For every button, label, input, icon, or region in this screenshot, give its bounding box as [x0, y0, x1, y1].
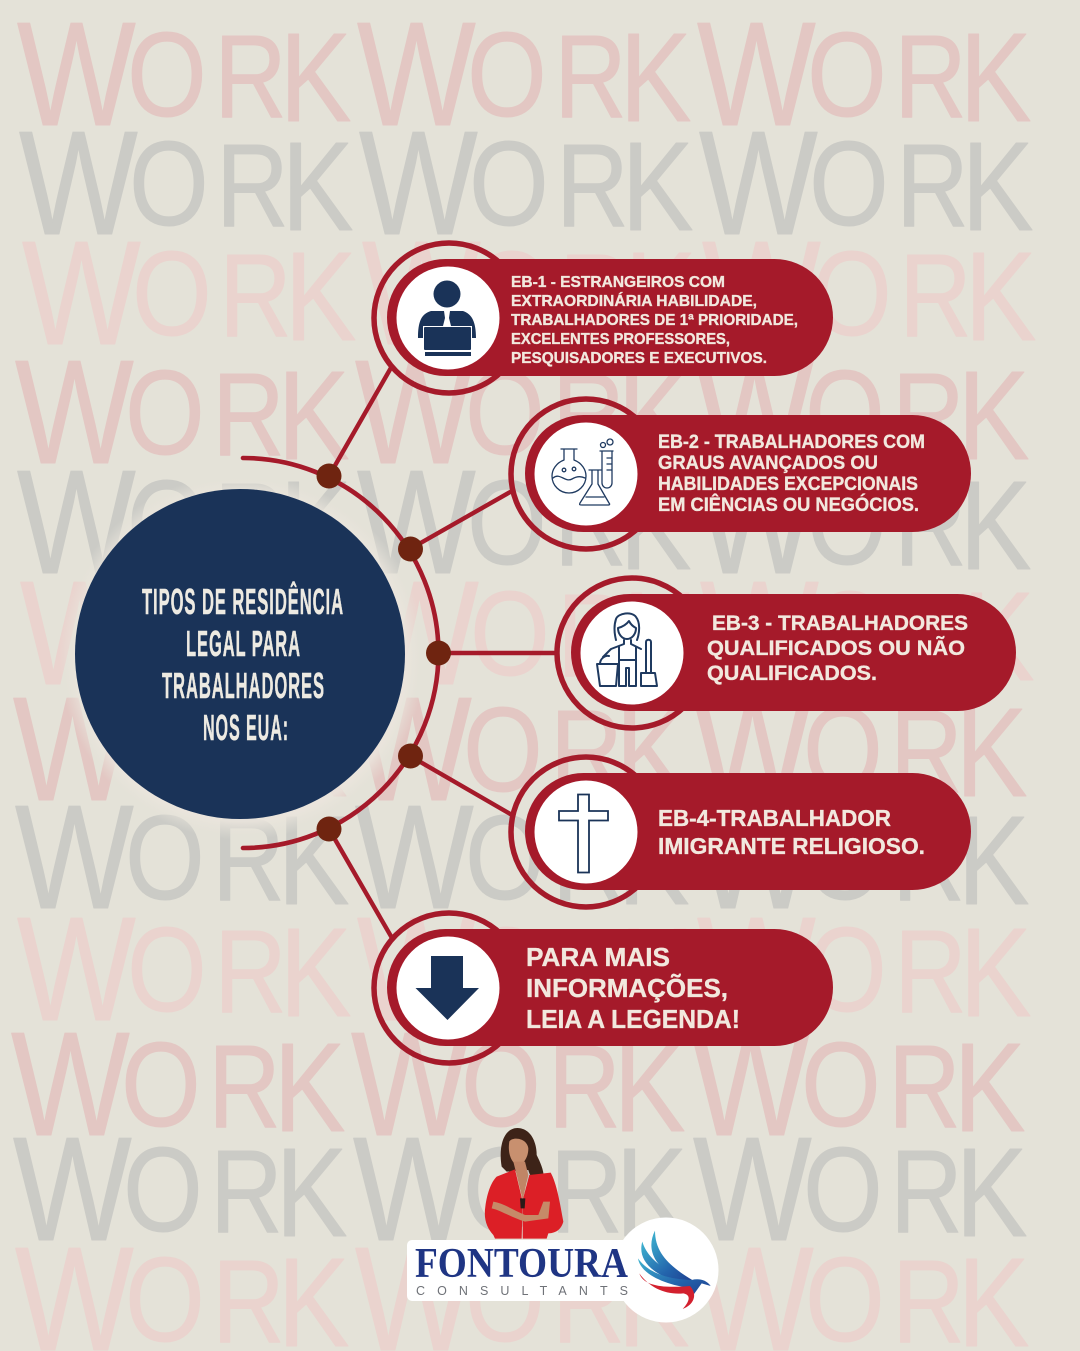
background pattern: repeated WORK words: W	[13, 1107, 132, 1272]
background pattern: repeated WORK words: O	[132, 226, 212, 361]
background pattern: repeated WORK words: R	[554, 906, 627, 1038]
background pattern: repeated WORK words: W	[699, 101, 818, 266]
background pattern: repeated WORK words: W	[357, 440, 476, 605]
text: EB-1	[511, 274, 798, 367]
background pattern: repeated WORK words: O	[129, 116, 209, 251]
background pattern: repeated WORK words: O	[463, 682, 543, 817]
title: LEGAL PARA	[186, 623, 301, 664]
background pattern: repeated WORK words: R	[890, 686, 963, 818]
background pattern: repeated WORK words: O	[470, 566, 550, 701]
background pattern: repeated WORK words: R	[208, 1021, 281, 1153]
connector dots	[316, 464, 451, 842]
logo: Fontoura Consultants: CONSULTANTS	[416, 1284, 628, 1298]
text: EB-1: PESQUISADORES E EXECUTIVOS.	[511, 350, 767, 367]
text: EB-3: QUALIFICADOS.	[707, 662, 877, 685]
portrait: consultant in red blazer	[485, 1128, 563, 1239]
background pattern: repeated WORK words: R	[896, 120, 969, 252]
text: EB-4: IMIGRANTE RELIGIOSO.	[658, 833, 925, 859]
background pattern: repeated WORK words: K	[278, 790, 349, 931]
background pattern: repeated WORK words: K	[282, 116, 353, 257]
background pattern: repeated WORK words: R	[894, 11, 967, 143]
background pattern: repeated WORK words: O	[130, 566, 210, 701]
background pattern: repeated WORK words: K	[616, 1122, 687, 1263]
background pattern: repeated WORK words: O	[805, 345, 885, 480]
background pattern: repeated WORK words: W	[695, 330, 814, 495]
background pattern: repeated WORK words: K	[620, 7, 691, 148]
background pattern: repeated WORK words: W	[20, 551, 139, 716]
background pattern: repeated WORK words: K	[280, 902, 351, 1043]
background pattern: repeated WORK words: W	[693, 1107, 812, 1272]
background pattern: repeated WORK words: O	[803, 1122, 883, 1257]
background pattern: repeated WORK words: R	[550, 1126, 623, 1258]
background pattern: repeated WORK words: R	[890, 1126, 963, 1258]
background pattern: repeated WORK words: R	[892, 349, 965, 481]
text: EB-4	[658, 805, 925, 859]
title: NOS EUA:	[203, 707, 289, 748]
background pattern: repeated WORK words: R	[210, 686, 283, 818]
background pattern: repeated WORK words: K	[625, 226, 696, 367]
background pattern: repeated WORK words: K	[278, 345, 349, 486]
background pattern: repeated WORK words: K	[618, 345, 689, 486]
logo eagle	[638, 1231, 711, 1309]
text: EB-1: EXCELENTES PROFESSORES,	[511, 331, 730, 348]
connector arc and lines	[243, 366, 556, 938]
background pattern: repeated WORK words: R	[559, 230, 632, 362]
background pattern: repeated WORK words: R	[554, 11, 627, 143]
background pattern: repeated WORK words: W	[351, 1002, 470, 1167]
background pattern: repeated WORK words: W	[357, 887, 476, 1052]
background pattern: repeated WORK words: K	[274, 1017, 345, 1158]
background pattern: repeated WORK words: O	[807, 455, 887, 590]
background pattern: repeated WORK words: R	[210, 1126, 283, 1258]
background pattern: repeated WORK words: O	[463, 1122, 543, 1257]
background pattern: repeated WORK words: R	[557, 570, 630, 702]
background pattern: repeated WORK words: K	[618, 790, 689, 931]
background pattern: repeated WORK words: W	[22, 211, 141, 376]
background pattern: repeated WORK words: W	[697, 887, 816, 1052]
background pattern: repeated WORK words: W	[700, 551, 819, 716]
background pattern: repeated WORK words: W	[15, 775, 134, 940]
background pattern: repeated WORK words: R	[216, 120, 289, 252]
icon: cross	[559, 794, 608, 872]
logo: Fontoura Consultants	[407, 1218, 718, 1322]
panel: EB-2	[511, 399, 971, 549]
background pattern: repeated WORK words: K	[283, 566, 354, 707]
icon: cleaning worker	[597, 613, 657, 686]
background pattern: repeated WORK words: O	[472, 226, 552, 361]
icon: person at laptop	[418, 280, 476, 356]
background pattern: repeated WORK words: O	[123, 1122, 203, 1257]
background pattern: repeated WORK words: K	[280, 7, 351, 148]
background pattern: repeated WORK words: O	[467, 902, 547, 1037]
background pattern: repeated WORK words: O	[807, 902, 887, 1037]
background pattern: repeated WORK words: W	[362, 211, 481, 376]
background pattern: repeated WORK words: O	[812, 226, 892, 361]
icon: lab flasks	[552, 439, 613, 505]
background pattern: repeated WORK words: W	[13, 667, 132, 832]
text: call to action: LEIA A LEGENDA!	[526, 1004, 740, 1034]
background pattern: repeated WORK words: R	[899, 230, 972, 362]
background pattern: repeated WORK words: W	[11, 1002, 130, 1167]
background pattern: repeated WORK words: O	[801, 1017, 881, 1152]
background pattern: repeated WORK words: O	[127, 455, 207, 590]
text: EB-3: EB-3 - TRABALHADORES	[712, 612, 968, 635]
background pattern: repeated WORK words: W	[691, 1002, 810, 1167]
background pattern: repeated WORK words: R	[552, 349, 625, 481]
background pattern: repeated WORK words: R	[214, 459, 287, 591]
background pattern: repeated WORK words: R	[214, 906, 287, 1038]
background pattern: repeated WORK words: R	[554, 459, 627, 591]
background pattern: repeated WORK words: O	[465, 345, 545, 480]
background pattern: repeated WORK words: W	[353, 667, 472, 832]
background pattern: repeated WORK words: R	[894, 906, 967, 1038]
background pattern: repeated WORK words: K	[276, 682, 347, 823]
background pattern: repeated WORK words: R	[894, 459, 967, 591]
background pattern: repeated WORK words: R	[548, 1021, 621, 1153]
text: call to action	[526, 942, 740, 1034]
background pattern: repeated WORK words: W	[15, 330, 134, 495]
center circle with title	[59, 474, 425, 840]
background pattern: repeated WORK words: R	[550, 686, 623, 818]
text: EB-2: HABILIDADES EXCEPCIONAIS	[658, 474, 918, 495]
background pattern: repeated WORK words: K	[958, 790, 1029, 931]
panel: call to action	[374, 913, 833, 1063]
background pattern: repeated WORK words: W	[355, 330, 474, 495]
background pattern: repeated WORK words: W	[693, 667, 812, 832]
background pattern: repeated WORK words: K	[958, 345, 1029, 486]
background pattern: repeated WORK words: R	[212, 349, 285, 481]
background pattern: repeated WORK words: O	[125, 345, 205, 480]
background pattern: repeated WORK words: K	[963, 566, 1034, 707]
background pattern: repeated WORK words: O	[465, 790, 545, 925]
text: EB-1: EXTRAORDINÁRIA HABILIDADE,	[511, 291, 757, 310]
background pattern: repeated WORK words: K	[623, 566, 694, 707]
background pattern: repeated WORK words: O	[809, 116, 889, 251]
background pattern: repeated WORK words: K	[614, 1017, 685, 1158]
center circle with title: TIPOS DE RESIDÊNCIA	[142, 580, 344, 622]
background pattern: repeated WORK words: R	[892, 794, 965, 926]
background pattern: repeated WORK words: K	[620, 902, 691, 1043]
background pattern: repeated WORK words: W	[695, 775, 814, 940]
background pattern: repeated WORK words: O	[127, 902, 207, 1037]
background pattern: repeated WORK words: K	[954, 1017, 1025, 1158]
text: EB-4: EB-4-TRABALHADOR	[658, 805, 891, 831]
background pattern: repeated WORK words: R	[556, 120, 629, 252]
panel: EB-3	[557, 578, 1016, 728]
background pattern: repeated WORK words: K	[962, 116, 1033, 257]
background pattern: repeated WORK words: K	[280, 455, 351, 596]
background pattern: repeated WORK words: W	[17, 440, 136, 605]
background pattern: repeated WORK words: W	[359, 101, 478, 266]
background pattern: repeated WORK words: O	[125, 790, 205, 925]
background pattern: repeated WORK words: W	[360, 551, 479, 716]
background pattern: repeated WORK words: W	[697, 440, 816, 605]
background pattern: repeated WORK words: K	[616, 682, 687, 823]
background pattern: repeated WORK words: O	[807, 7, 887, 142]
text: EB-1: TRABALHADORES DE 1ª PRIORIDADE,	[511, 312, 798, 329]
background pattern: repeated WORK words: O	[127, 7, 207, 142]
background pattern: repeated WORK words: R	[888, 1021, 961, 1153]
text: EB-2: EM CIÊNCIAS OU NEGÓCIOS.	[658, 494, 919, 516]
text: EB-3: QUALIFICADOS OU NÃO	[707, 637, 965, 660]
logo wordmark: FONTOURA	[415, 1241, 629, 1287]
text: EB-1: EB-1 - ESTRANGEIROS COM	[511, 274, 725, 291]
background pattern: repeated WORK words: K	[956, 1122, 1027, 1263]
text: call to action: INFORMAÇÕES,	[526, 973, 728, 1003]
background pattern: repeated WORK words: R	[897, 570, 970, 702]
background pattern: repeated WORK words: R	[552, 794, 625, 926]
background pattern: repeated WORK words: W	[355, 775, 474, 940]
background pattern: repeated WORK words: R	[219, 230, 292, 362]
background pattern: repeated WORK words: O	[467, 7, 547, 142]
background pattern: repeated WORK words: K	[276, 1122, 347, 1263]
background pattern: repeated WORK words: W	[19, 101, 138, 266]
background pattern: repeated WORK words: O	[803, 682, 883, 817]
background pattern: repeated WORK words: K	[956, 682, 1027, 823]
background pattern: repeated WORK words: K	[622, 116, 693, 257]
panel: EB-4	[511, 757, 971, 907]
background pattern: repeated WORK words: O	[805, 790, 885, 925]
panel: EB-1	[374, 243, 833, 393]
background pattern: repeated WORK words: K	[620, 455, 691, 596]
title	[142, 580, 344, 748]
background pattern: repeated WORK words: W	[702, 211, 821, 376]
background pattern: repeated WORK words: K	[960, 455, 1031, 596]
background pattern: repeated WORK words: O	[469, 116, 549, 251]
background pattern: repeated WORK words: R	[212, 794, 285, 926]
background pattern: repeated WORK words: O	[467, 455, 547, 590]
background pattern: repeated WORK words: O	[461, 1017, 541, 1152]
background pattern: repeated WORK words: K	[965, 226, 1036, 367]
text: EB-2: GRAUS AVANÇADOS OU	[658, 453, 878, 474]
background pattern: repeated WORK words: O	[810, 566, 890, 701]
background pattern: repeated WORK words: O	[123, 682, 203, 817]
background pattern: repeated WORK words: K	[960, 902, 1031, 1043]
background pattern: repeated WORK words: R	[214, 11, 287, 143]
title: TRABALHADORES	[162, 665, 325, 706]
background pattern: repeated WORK words: O	[121, 1017, 201, 1152]
icon: down arrow	[416, 956, 479, 1020]
text: EB-2	[658, 432, 925, 516]
text: EB-3	[707, 612, 968, 685]
background pattern: repeated WORK words: K	[285, 226, 356, 367]
background pattern: repeated WORK words: R	[217, 570, 290, 702]
background pattern: repeated WORK words: W	[17, 887, 136, 1052]
text: EB-2: EB-2 - TRABALHADORES COM	[658, 432, 925, 453]
text: call to action: PARA MAIS	[526, 942, 670, 972]
background pattern: repeated WORK words: K	[960, 7, 1031, 148]
background pattern: repeated WORK words: W	[353, 1107, 472, 1272]
